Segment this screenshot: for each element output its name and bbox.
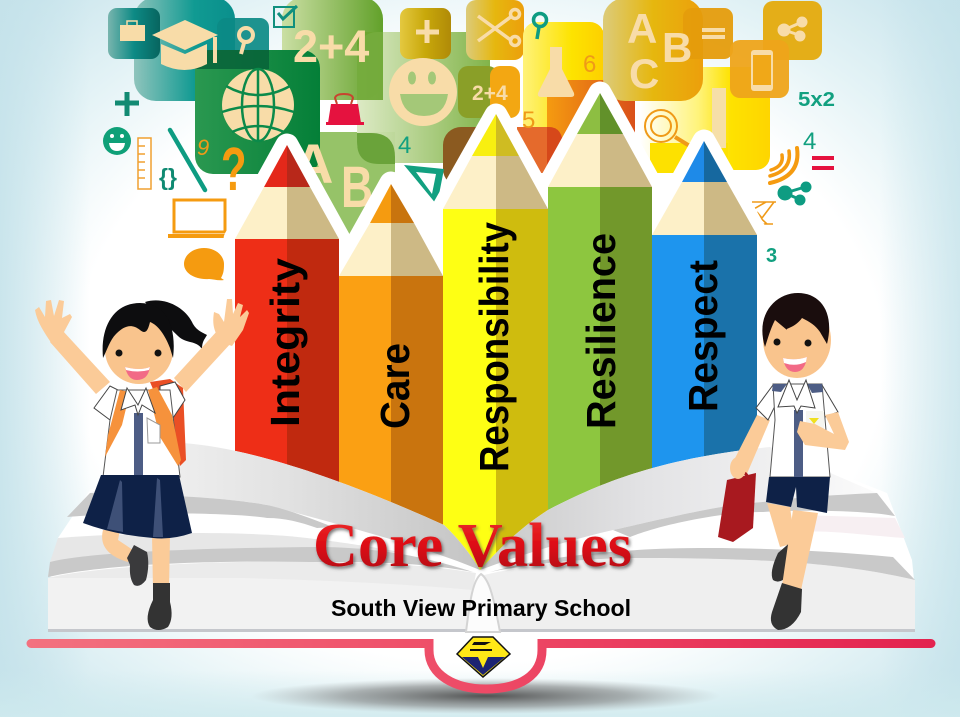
right white page base (480, 447, 915, 590)
red base line with U dip (31, 644, 931, 689)
label: Responsibility: Responsibility (471, 222, 517, 472)
boy head (763, 302, 831, 378)
text: 5: 5 (522, 107, 535, 134)
girl legs (102, 530, 170, 590)
icon: magnifier small (534, 14, 546, 39)
icon: equals red (812, 158, 834, 168)
text: letters ABC (627, 5, 692, 97)
school logo (457, 637, 510, 677)
icon: laptop (168, 200, 225, 236)
text: letter B: B (341, 155, 373, 220)
boy front sock and shoe (771, 583, 802, 630)
icon: plus (416, 20, 439, 43)
boy back sock and shoe (772, 540, 793, 582)
girl pocket (147, 418, 160, 443)
left bottom page light face (48, 578, 473, 630)
left upper page (90, 443, 480, 570)
boy mouth (783, 357, 807, 372)
character: boy (718, 293, 849, 630)
subtitle: South View Primary School (331, 595, 631, 621)
text: letters ABC: A (627, 5, 657, 52)
left light band (50, 533, 400, 562)
icon: plus teal (115, 92, 139, 116)
icon: pen (170, 130, 205, 190)
boy shirt (756, 384, 838, 477)
text: letters ABC: C (629, 50, 659, 97)
label: Respect: Respect (680, 260, 726, 412)
icon: scissors (478, 10, 520, 46)
girl ponytail (145, 300, 207, 349)
icon: smiley (389, 58, 457, 126)
icon: magnifier teal (239, 28, 253, 54)
boy placket (794, 410, 803, 477)
girl placket (134, 413, 143, 477)
boy left arm (730, 415, 770, 476)
text: 5x2: 5x2 (798, 89, 835, 111)
girl skirt pleats (107, 478, 163, 537)
icon: speech bubble (184, 248, 224, 280)
bottom white edge (0, 717, 960, 720)
girl skirt (83, 475, 192, 538)
icon: checkbox (274, 6, 297, 27)
pencil: Responsibility (443, 114, 548, 575)
text: letters ABC: B (662, 24, 692, 71)
icon: binder clip (326, 94, 364, 125)
page edge lines (48, 629, 915, 632)
icon: phone (751, 50, 773, 91)
boy bag (718, 472, 756, 542)
boy right arm and hand (797, 412, 849, 450)
icon cloud: right yellow and orange cards (443, 0, 822, 187)
girl eyes (116, 350, 162, 356)
text: letter A: A (293, 132, 333, 195)
icon: briefcase (120, 21, 145, 41)
boy hair (762, 293, 829, 347)
icon: smiley teal (103, 127, 131, 155)
girl collar (121, 388, 155, 415)
pencil: Resilience (548, 93, 652, 525)
icon: share teal (779, 183, 810, 204)
text: 6: 6 (583, 51, 596, 78)
boy yoke (772, 384, 823, 393)
text: 3: 3 (766, 245, 777, 267)
text: 9: 9 (197, 135, 209, 160)
icon: magnifier orange (645, 110, 693, 148)
girl head (105, 316, 173, 384)
pencil: Care (339, 184, 443, 540)
icon: checked triangle (752, 202, 776, 224)
girl bent sock and shoe (127, 545, 148, 586)
boy front leg (782, 510, 818, 590)
label: Integrity: Integrity (262, 258, 308, 427)
girl shirt (94, 382, 185, 477)
spine (466, 574, 500, 632)
girl sock and shoe (148, 583, 172, 630)
icon: wifi signal (770, 148, 797, 183)
pencil: Integrity (235, 145, 339, 500)
open book (48, 443, 915, 632)
icon cloud: left teal and green cards (108, 0, 524, 236)
icon: flask (538, 47, 574, 97)
icon: curly braces: {} (159, 164, 177, 190)
boy pocket badge (806, 411, 824, 429)
text: 2+4: 2+4 (293, 21, 369, 72)
left grey strip upper (67, 493, 333, 528)
icon: graduation cap (152, 20, 218, 70)
icon: globe (222, 69, 294, 141)
boy shorts (766, 477, 830, 513)
girl backpack straps (105, 387, 181, 466)
boy hand on bag (730, 457, 746, 479)
floor shadow (251, 678, 721, 714)
character: girl (35, 299, 249, 630)
left bottom page (48, 562, 476, 630)
label: Care: Care (372, 343, 418, 429)
text: 2+4 small: 2+4 (472, 82, 508, 105)
boy back leg (767, 503, 795, 547)
right pale band (800, 515, 905, 538)
right upper page (480, 447, 877, 570)
text: 4 teal: 4 (803, 128, 816, 155)
boy eyes (774, 338, 812, 346)
text: 4: 4 (398, 132, 411, 159)
girl arms and hands (35, 299, 249, 394)
right grey strip upper (613, 493, 895, 537)
right bottom page (484, 558, 915, 630)
icon: share (779, 18, 806, 40)
title: Core Values (313, 512, 632, 580)
icon: question mark: ? (221, 135, 247, 204)
girl mouth (125, 367, 150, 380)
label: Resilience: Resilience (578, 233, 624, 429)
right grey strip lower (490, 548, 915, 580)
icon: equals (702, 30, 725, 37)
girl backpack (150, 379, 186, 466)
left white page base (48, 443, 480, 590)
pencil tip white outlines (235, 93, 757, 276)
icon: ruler (138, 138, 151, 189)
boy collar (778, 380, 815, 413)
icon: set square (404, 165, 444, 205)
left grey strip lower (48, 547, 473, 577)
girl hair (103, 303, 174, 358)
pencil: Respect (652, 141, 757, 480)
